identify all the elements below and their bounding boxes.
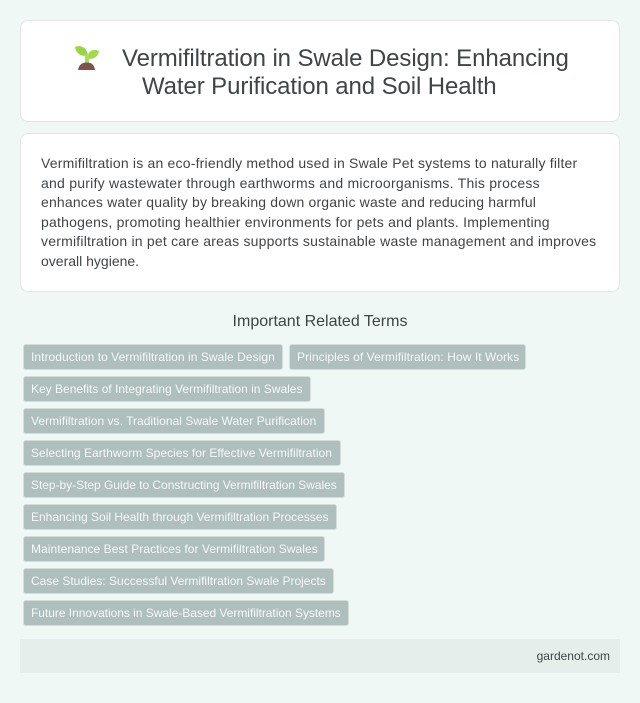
text: description: Vermifiltration is an eco-friendly method used in Swale Pet systems to naturally filter — [41, 155, 577, 171]
tag 10: Future Innovations in Swale-Based Vermifiltration Systems — [31, 606, 341, 620]
text: description: and purify wastewater through earthworms and microorganisms. This process — [41, 175, 540, 191]
heading: important related terms: Important Related Terms — [233, 313, 407, 330]
tag 2: Principles of Vermifiltration: How It Works — [297, 350, 519, 364]
text: site name: gardenot.com — [537, 649, 610, 663]
tag 6: Step-by-Step Guide to Constructing Vermifiltration Swales — [31, 478, 337, 492]
panel: description card — [20, 133, 620, 292]
tag 10 — [23, 600, 349, 626]
tag list — [23, 344, 526, 626]
tag 9: Case Studies: Successful Vermifiltration Swale Projects — [31, 574, 326, 588]
tag 5 — [23, 440, 341, 466]
tag 4 — [23, 408, 325, 434]
tag 8 — [23, 536, 325, 562]
tag 8: Maintenance Best Practices for Vermifiltration Swales — [31, 542, 318, 556]
tag 9 — [23, 568, 334, 594]
heading: title — [122, 45, 569, 100]
text: description: enhances water quality by breaking down organic waste and reducing harmful — [41, 194, 536, 210]
tag 3 — [23, 376, 311, 402]
tag 2 — [289, 344, 526, 370]
tag 4: Vermifiltration vs. Traditional Swale Water Purification — [31, 414, 316, 428]
footer bar — [20, 639, 620, 673]
heading: title: Vermifiltration in Swale Design: Enhancing — [122, 45, 569, 72]
text: description: vermifiltration in pet care areas supports sustainable waste management and improves — [41, 233, 596, 249]
text: description — [41, 155, 596, 269]
tag 3: Key Benefits of Integrating Vermifiltration in Swales — [31, 382, 302, 396]
tag 6 — [23, 472, 345, 498]
tag 7 — [23, 504, 337, 530]
panel: title card — [20, 20, 620, 122]
text: description: overall hygiene. — [41, 253, 139, 269]
heading: title: Water Purification and Soil Health — [142, 73, 497, 100]
tag 5: Selecting Earthworm Species for Effective Vermifiltration — [31, 446, 332, 460]
tag 1 — [23, 344, 283, 370]
tag 1: Introduction to Vermifiltration in Swale Design — [31, 350, 275, 364]
text: description: pathogens, promoting healthier environments for pets and plants. Implementing — [41, 214, 550, 230]
icon: seedling — [75, 46, 99, 70]
tag 7: Enhancing Soil Health through Vermifiltration Processes — [31, 510, 328, 524]
